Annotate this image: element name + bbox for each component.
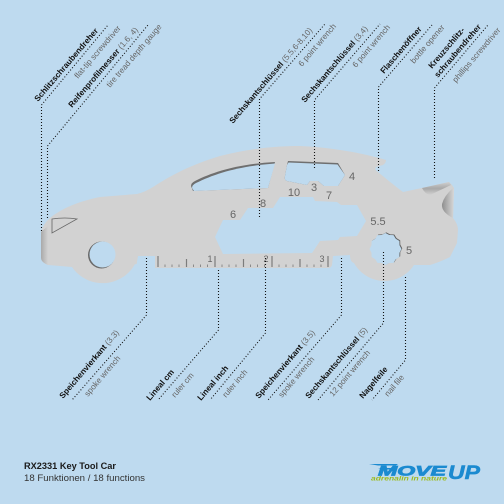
wrench size numbers: 8 [260, 198, 266, 210]
wrench size numbers: 10 [288, 187, 300, 199]
car key tool [41, 146, 458, 283]
upper wrench window [285, 161, 345, 186]
label: bottle opener [379, 23, 447, 75]
label: ruler cm [145, 368, 196, 402]
wrench size numbers: 5 [406, 245, 412, 257]
label: ruler inch: ruler inch [221, 368, 250, 399]
front wheel hole [88, 242, 116, 268]
label: 6 point wrench 3,4: 6 point wrench [351, 23, 392, 69]
label: 6 point wrench 3,4: Sechskantschlüssel (3,4) [300, 24, 370, 104]
label: tire tread depth gauge: Reifenprofilmesser (1.6, 4) [67, 25, 140, 109]
product subtitle: 18 Funktionen / 18 functions [24, 473, 145, 484]
label: ruler cm: ruler cm [170, 371, 196, 399]
wrench size numbers: 3 [311, 182, 317, 194]
label: spoke wrench 3.5: Speichenvierkant (3.5) [254, 328, 317, 400]
label: nail file: Nagelfeile [358, 365, 390, 400]
label: 6 point wrench 5.5-10: 6 point wrench [297, 22, 338, 68]
wrench size numbers: 7 [326, 190, 332, 202]
ruler minor ticks [165, 264, 321, 267]
hex wrench window [215, 197, 366, 254]
leader lines [42, 24, 488, 400]
label: 12 point wrench: Sechskantschlüssel (5) [304, 325, 370, 400]
label: spoke wrench 3.3: spoke wrench [83, 354, 123, 398]
ruler numbers: 2 [263, 254, 269, 264]
product title: RX2331 Key Tool Car [24, 461, 116, 472]
label: phillips screwdriver [427, 22, 503, 84]
logo: MoveUp [369, 462, 480, 484]
label: phillips screwdriver: Kreuzschlitz- [427, 26, 467, 70]
ruler ticks [158, 256, 328, 267]
label: tire tread depth gauge: tire tread depth gauge [105, 22, 164, 89]
logo tagline: adrenalin in nature [371, 476, 447, 482]
rear spike bevel [422, 182, 451, 195]
label: bottle opener: Flaschenöffner [379, 24, 424, 75]
label: phillips screwdriver: phillips screwdriver [451, 26, 503, 84]
label: ruler inch: Lineal inch [196, 364, 230, 402]
label: bottle opener: bottle opener [409, 23, 447, 65]
label: spoke wrench 3.5: spoke wrench [277, 355, 317, 399]
front bevel [41, 226, 48, 265]
headlight [52, 218, 77, 233]
wrench size numbers [230, 171, 412, 257]
ruler numbers: 3 [319, 254, 325, 264]
label: ruler cm: Lineal cm [145, 368, 176, 402]
ruler numbers [207, 254, 325, 264]
label: flat-tip screwdriver: Schlitzschraubendreher [33, 26, 101, 103]
12 point wrench hole [370, 232, 402, 265]
label: flat-tip screwdriver: flat-tip screwdriver [73, 24, 123, 80]
label: nail file: nail file [383, 373, 406, 398]
car silhouette [41, 146, 458, 283]
label: spoke wrench 3.3: Speichenvierkant (3.3) [58, 328, 121, 400]
phillips screwdriver bevel [442, 188, 454, 218]
label: nail file [358, 365, 406, 400]
wrench size numbers: 4 [349, 171, 355, 183]
label: 6 point wrench 5.5-10: Sechskantschlüssel (5.5,6-8,10) [228, 26, 315, 125]
logo UP: UP [448, 463, 480, 484]
ruler numbers: 1 [207, 254, 213, 264]
label: 12 point wrench: 12 point wrench [328, 348, 372, 398]
logo speed lines [369, 464, 398, 470]
label: phillips screwdriver: schraubendreher [433, 22, 483, 79]
wrench size numbers: 6 [230, 209, 236, 221]
logo wordmark: MOVE [378, 462, 447, 478]
wrench size numbers: 5.5 [370, 216, 386, 228]
side window [191, 162, 275, 191]
label: ruler inch [196, 364, 250, 402]
